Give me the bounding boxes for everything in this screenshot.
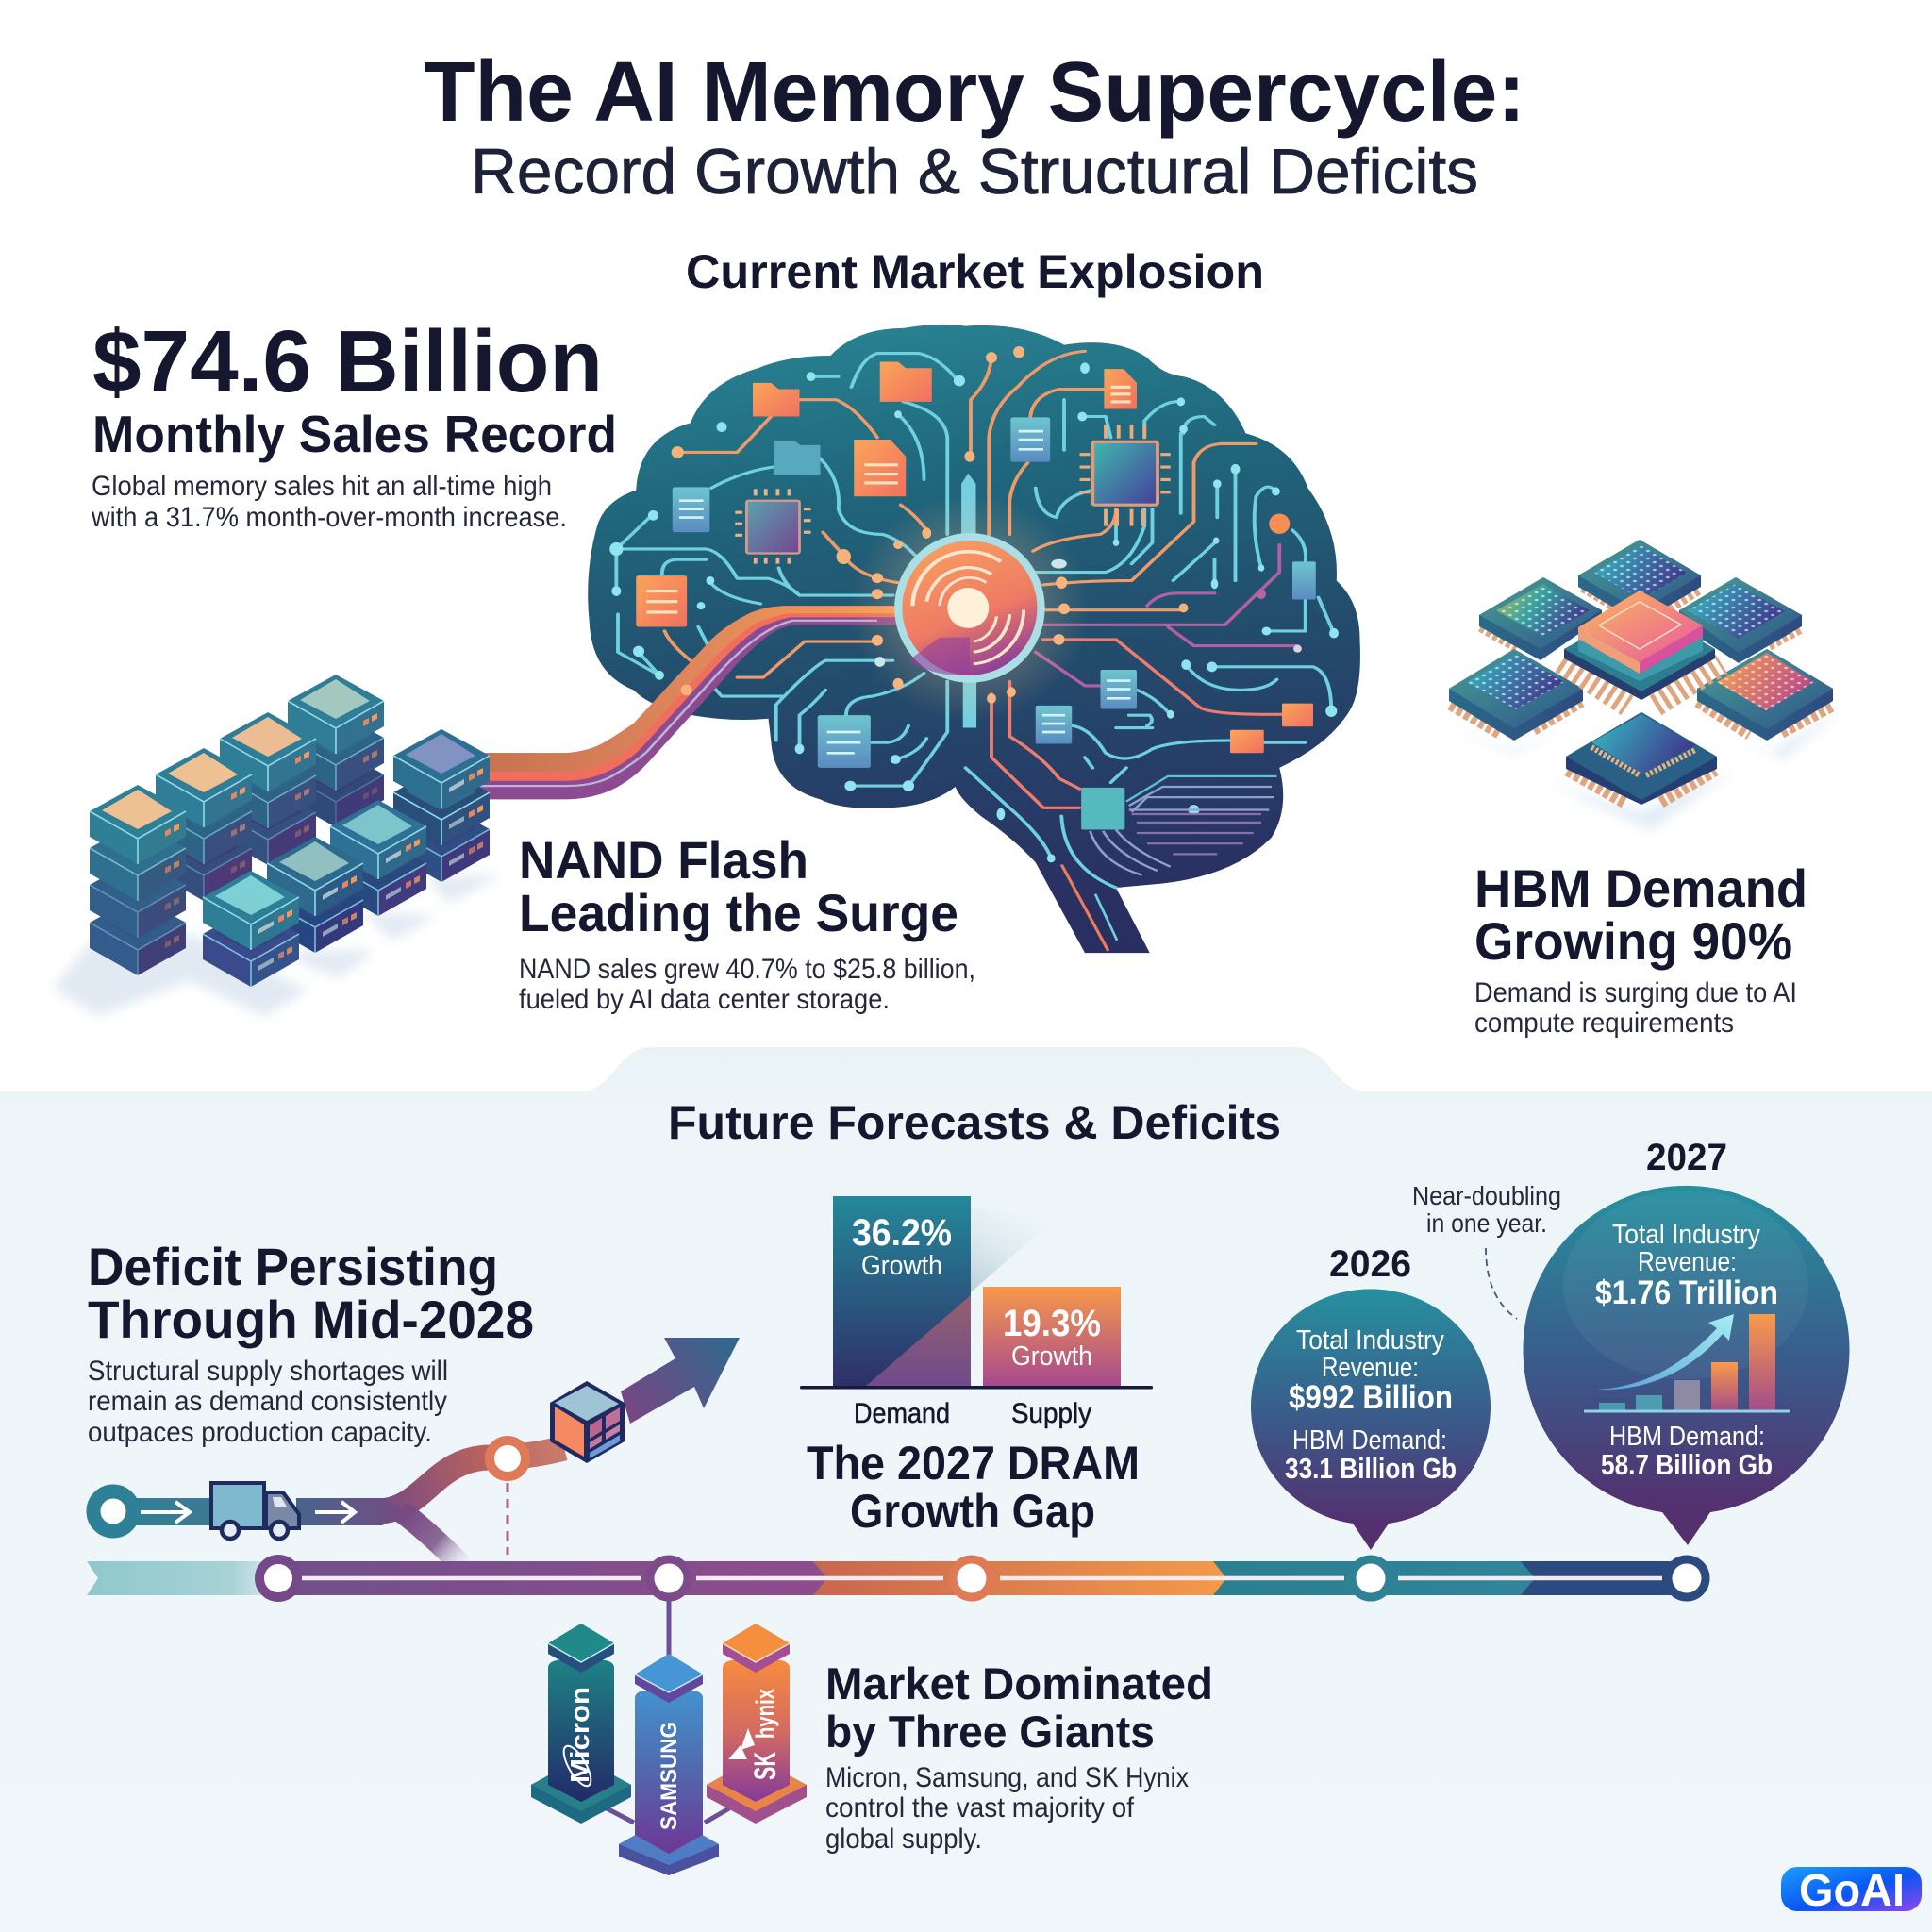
mini bar chart	[1584, 1314, 1790, 1413]
title block: Record Growth & Structural Deficits	[471, 136, 1478, 208]
callout: monthly sales record: with a 31.7% month-over-month increase.	[91, 502, 567, 533]
core glow	[850, 494, 1089, 722]
pillar: Micron: Micron	[565, 1687, 594, 1783]
forecast: 2027 bubble: 2027	[1646, 1137, 1727, 1178]
heading: DRAM growth gap: Growth Gap	[850, 1485, 1095, 1538]
callout: NAND flash: fueled by AI data center storage.	[519, 984, 890, 1015]
title block: The AI Memory Supercycle:	[424, 45, 1525, 140]
dashed connector	[506, 1483, 509, 1555]
demand bar	[833, 1196, 971, 1387]
callout: deficit persisting	[88, 1237, 534, 1448]
callout: three giants	[825, 1658, 1213, 1855]
gap wedge	[971, 1208, 1054, 1292]
arrow: route start	[141, 1502, 190, 1523]
illustration: AI brain circuit	[452, 325, 1360, 953]
callout: HBM demand	[1474, 858, 1807, 1039]
callout: HBM demand: HBM Demand	[1474, 858, 1807, 918]
icon: memory cube	[550, 1381, 625, 1463]
circuit traces: orange and pink	[664, 351, 1298, 808]
callout: monthly sales record: Global memory sales hit an all-time high	[92, 471, 552, 502]
supply bar	[983, 1287, 1121, 1387]
panel: future forecasts background	[0, 1047, 1932, 1932]
callout: three giants: global supply.	[825, 1824, 982, 1855]
icon: orange squares	[1230, 704, 1313, 753]
forecast: 2026 bubble: 33.1 Billion Gb	[1285, 1452, 1457, 1485]
connector lines	[607, 1601, 729, 1823]
forecast: 2026 bubble: 2026	[1329, 1243, 1411, 1285]
forecast: 2027 bubble: 58.7 Billion Gb	[1601, 1448, 1773, 1481]
node dots	[609, 362, 1339, 862]
supply value: Growth	[1011, 1341, 1092, 1372]
callout: deficit persisting: Structural supply shortages will	[88, 1356, 448, 1387]
supply value: 19.3%	[1003, 1303, 1101, 1344]
demand value: 36.2%	[852, 1212, 952, 1254]
forecast: 2026 bubble: Revenue:	[1322, 1353, 1419, 1383]
demand wedge	[865, 1295, 971, 1387]
chip: centre HBM stack	[1561, 591, 1722, 706]
cerebellum traces	[1091, 776, 1277, 875]
timeline node 5	[1668, 1559, 1706, 1597]
timeline node 1	[259, 1559, 297, 1597]
callout: deficit persisting: Deficit Persisting	[88, 1237, 498, 1296]
callout: deficit persisting: Through Mid-2028	[88, 1290, 534, 1349]
callout: deficit persisting: remain as demand consistently	[88, 1386, 447, 1417]
callout: three giants: Micron, Samsung, and SK Hynix	[825, 1762, 1189, 1793]
axis labels: Demand	[854, 1398, 950, 1429]
callout: HBM demand: Growing 90%	[1474, 911, 1792, 971]
forecast: 2027 bubble: $1.76 Trillion	[1595, 1274, 1778, 1311]
badge: GoAI: GoAI	[1799, 1866, 1905, 1916]
chip: upper right	[1679, 577, 1802, 663]
axis labels: Supply	[1011, 1398, 1091, 1429]
annotation: near-doubling: in one year.	[1426, 1208, 1547, 1238]
icon: folders	[753, 362, 932, 475]
section heading: current market explosion: Current Market Explosion	[686, 245, 1264, 298]
circuit traces: blue	[616, 354, 1334, 888]
title block	[424, 45, 1525, 208]
route band: split	[377, 1448, 564, 1566]
chip: bottom	[1566, 712, 1717, 805]
brainstem traces	[1061, 864, 1117, 951]
core ring	[894, 533, 1045, 683]
forecast: 2026 bubble: HBM Demand:	[1292, 1425, 1447, 1456]
icon: orange documents	[636, 369, 1137, 626]
pillar: SK hynix: SK	[748, 1752, 782, 1780]
chip: upper left	[1479, 577, 1602, 660]
forecast: 2026 bubble: $992 Billion	[1289, 1379, 1453, 1416]
axis labels	[854, 1398, 1091, 1429]
callout: three giants: by Three Giants	[825, 1707, 1155, 1757]
illustration: supply route with truck	[93, 1338, 740, 1566]
forecast: 2027 bubble	[1523, 1137, 1850, 1545]
heading: DRAM growth gap	[807, 1437, 1140, 1538]
data stream from servers into brain core	[452, 606, 898, 799]
forecast: 2027 bubble: HBM Demand:	[1609, 1422, 1765, 1452]
pillar: Samsung	[619, 1654, 719, 1875]
icon: chip left	[735, 489, 811, 564]
callout: three giants: control the vast majority of	[825, 1792, 1135, 1824]
timeline	[87, 1559, 1706, 1597]
chip: top	[1578, 540, 1701, 623]
chip: lower left	[1449, 649, 1583, 741]
arrow: demand outpaces	[621, 1338, 740, 1424]
pillar: Samsung: SAMSUNG	[657, 1722, 682, 1830]
icon: chip right	[1079, 425, 1171, 525]
arrow: after truck	[315, 1502, 355, 1523]
callout: NAND flash: Leading the Surge	[519, 883, 958, 942]
chip: lower right	[1697, 649, 1833, 741]
chip shadows	[1443, 708, 1844, 830]
icon: teal node block	[1081, 788, 1124, 829]
route band: start	[113, 1498, 211, 1525]
pillar: Micron	[531, 1624, 631, 1824]
callout: HBM demand: Demand is surging due to AI	[1474, 977, 1797, 1008]
callout: monthly sales record	[91, 312, 617, 533]
annotation: near-doubling: Near-doubling	[1412, 1181, 1561, 1210]
callout: NAND flash: NAND Flash	[519, 830, 808, 890]
route band: after truck	[296, 1498, 408, 1525]
forecast: 2026 bubble	[1251, 1243, 1491, 1550]
forecast: 2026 bubble: Total Industry	[1296, 1325, 1444, 1356]
callout: NAND flash: NAND sales grew 40.7% to $25.8 billion,	[519, 954, 975, 985]
callout: monthly sales record: $74.6 Billion	[92, 312, 603, 410]
start node	[93, 1491, 133, 1531]
callout: deficit persisting: outpaces production capacity.	[88, 1417, 432, 1448]
callout: HBM demand: compute requirements	[1474, 1008, 1734, 1039]
illustration: server racks	[54, 675, 503, 1016]
annotation: near-doubling	[1412, 1181, 1561, 1319]
central stems	[961, 474, 976, 728]
illustration: HBM chip cluster	[1443, 540, 1844, 830]
callout: three giants: Market Dominated	[825, 1658, 1213, 1708]
demand value	[852, 1212, 952, 1281]
axis	[800, 1386, 1153, 1389]
brain silhouette	[588, 325, 1360, 953]
orange node	[490, 1441, 525, 1476]
illustration: three memory giants	[531, 1601, 807, 1875]
section heading: future forecasts: Future Forecasts & Deficits	[668, 1096, 1281, 1149]
timeline node 2	[650, 1559, 688, 1597]
forecast: 2027 bubble: Revenue:	[1638, 1247, 1737, 1277]
demand value: Growth	[861, 1251, 942, 1281]
icon: blue documents	[673, 417, 1316, 768]
pillar: SK hynix: hynix	[751, 1689, 779, 1739]
timeline node 3	[953, 1559, 991, 1597]
heading: DRAM growth gap: The 2027 DRAM	[807, 1437, 1140, 1490]
pillar: SK hynix	[707, 1624, 807, 1824]
bar chart: DRAM growth gap	[800, 1196, 1153, 1429]
icon: truck	[211, 1483, 299, 1539]
forecast: 2027 bubble: Total Industry	[1612, 1220, 1760, 1250]
timeline node 4	[1352, 1559, 1390, 1597]
server floor shadow	[54, 874, 503, 1016]
callout: monthly sales record: Monthly Sales Record	[92, 405, 617, 463]
callout: NAND flash	[519, 830, 975, 1015]
supply value	[1003, 1303, 1101, 1372]
